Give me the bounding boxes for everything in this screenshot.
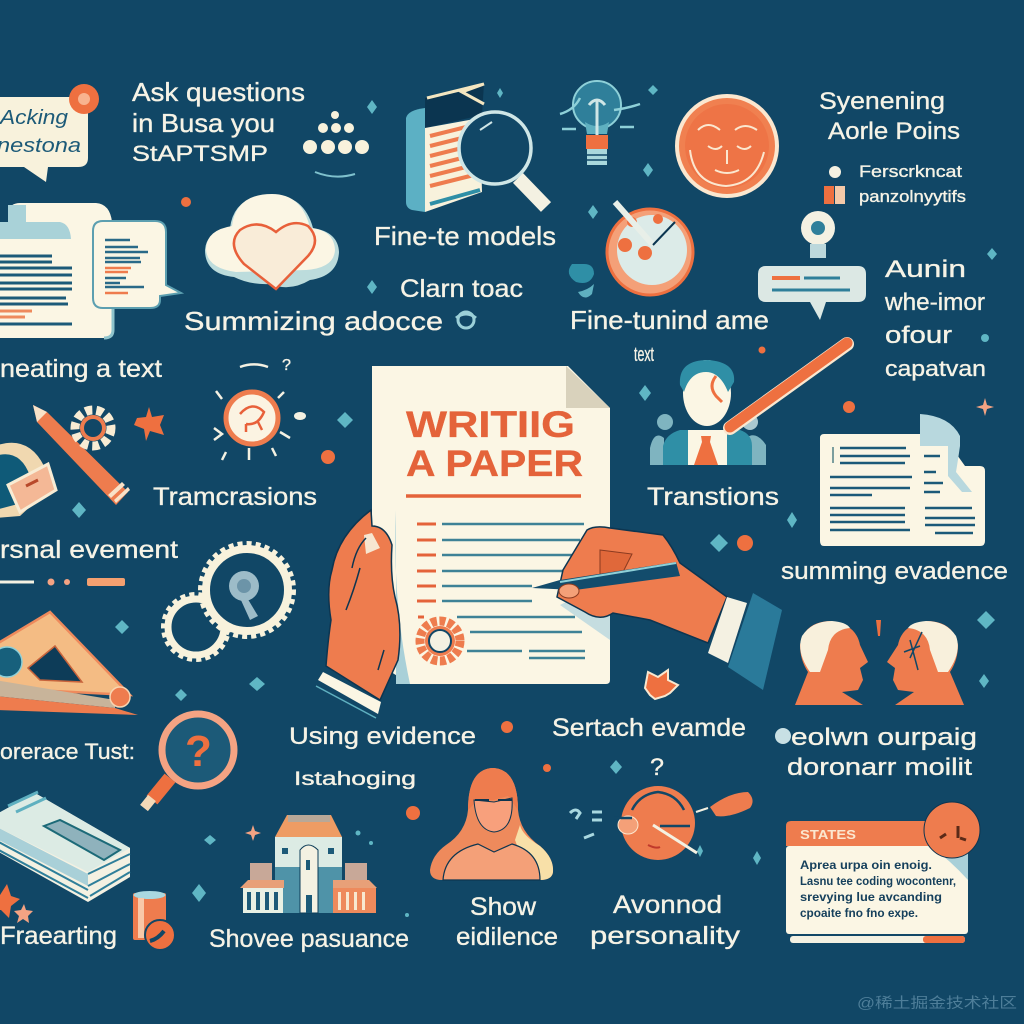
panel: documents with speech (0, 203, 181, 338)
label: fine-tunind ame text: Fine-tunind ame (570, 305, 769, 335)
label: seolwn ourpaig: doronarr moilit (787, 754, 972, 781)
label: personal evement: rsnal evement (0, 536, 178, 564)
icon: right hand with pen (532, 527, 782, 690)
icon: sun-like focus badge: ? (282, 357, 291, 374)
heading: aunin: whe-imor (884, 289, 985, 316)
icon: head with glasses: ? (650, 754, 664, 781)
label: seolwn ourpaig: eolwn ourpaig (791, 724, 977, 751)
icon: pencil and gear (33, 405, 164, 505)
heading: ask questions: in Busa you (132, 108, 275, 138)
panel: asking questions speech bubble: Acking (0, 107, 68, 129)
icon: gears (164, 544, 293, 659)
text block with icon: fersrcinoat: panzolnyytifs (859, 187, 966, 206)
heading: synening: Aorle Poins (828, 118, 960, 145)
icon: cylinder with circle (133, 891, 175, 950)
icon: light bulb (560, 81, 640, 165)
icon: left hand holding paper (316, 510, 400, 718)
lines of text (442, 524, 585, 658)
heading: ask questions (132, 77, 305, 166)
heading: aunin: capatvan (885, 356, 986, 381)
label: clarn toac: Clarn toac (400, 275, 523, 303)
icon: broken clock (569, 202, 693, 298)
label: avonnod personality (590, 891, 741, 950)
icon: magnifier with question mark: ? (185, 727, 212, 776)
text block with icon: fersrcinoat (824, 162, 966, 206)
panel: states card: cpoaite fno fno expe. (800, 908, 918, 920)
label: preface test: orerace Tust: (0, 739, 135, 764)
decorative sparkles (72, 85, 997, 917)
icon: sun-like focus badge (214, 357, 306, 460)
label: heating a text: neating a text (0, 355, 162, 383)
icon: wad of notes (0, 443, 56, 518)
panel: asking questions speech bubble (0, 84, 99, 182)
icon: stars (0, 884, 33, 923)
label: sertach evamde: Sertach evamde (552, 714, 746, 742)
icon: orange gear on paper (420, 621, 460, 661)
heading: ask questions: StAPTSMP (132, 141, 268, 166)
label: seolwn ourpaig (787, 724, 977, 781)
label: shovee pasuance: Shovee pasuance (209, 925, 409, 953)
label: avonnod personality: personality (590, 922, 741, 950)
label: show eidilence: eidilence (456, 923, 558, 951)
label: show eidilence: Show (470, 893, 537, 921)
title: writing a paper: A PAPER (406, 443, 583, 484)
panel: states card: srevying lue avcanding (800, 892, 942, 904)
label: fraerting: Fraearting (0, 922, 117, 950)
heading: aunin (884, 256, 986, 381)
heading: ask questions: Ask questions (132, 77, 305, 107)
panel: states card (786, 802, 980, 943)
label: fine-tunind ame text (570, 305, 769, 366)
label: fine-te models: Fine-te models (374, 221, 556, 251)
icon: star burst (645, 670, 678, 699)
icon: woman bust (430, 768, 553, 880)
panel: states card: Lasnu tee coding wocontenr, (800, 876, 956, 888)
label: fine-tunind ame text: text (634, 344, 654, 366)
heading: aunin: ofour (885, 322, 952, 349)
label: summizing adocce: Summizing adocce (184, 306, 443, 336)
label: tramcrasions: Tramcrasions (153, 483, 317, 511)
icon: person with tie and pencil (650, 343, 847, 465)
heading: synening (819, 88, 960, 145)
title: writing a paper (406, 404, 583, 484)
icon: dot pyramid (303, 111, 369, 177)
label: avonnod personality: Avonnod (613, 891, 722, 919)
panel: states card: Aprea urpa oin enoig. (800, 860, 932, 872)
heading: aunin: Aunin (885, 256, 966, 283)
panel: central paper (372, 366, 610, 684)
icon: document with magnifier (406, 83, 546, 212)
watermark: @稀土掘金技术社区 (857, 995, 1017, 1012)
red rule and dashes (406, 496, 581, 617)
label: transtions: Transtions (647, 483, 779, 511)
dashes under label (0, 578, 125, 586)
icon: head with glasses (570, 754, 753, 860)
icon: set square and ruler (0, 612, 138, 715)
icon: cloud with heart (205, 194, 339, 289)
label: summing evadence: summing evadence (781, 558, 1008, 585)
title: writing a paper: WRITIIG (406, 404, 575, 445)
heading: synening: Syenening (819, 88, 945, 115)
icon: magnifier with question mark (144, 714, 234, 808)
panel: documents right (820, 414, 985, 546)
panel: states card: STATES (800, 827, 856, 842)
text block with icon: fersrcinoat: Ferscrkncat (859, 162, 962, 181)
label: istahoging: Istahoging (294, 769, 416, 790)
icon: swirl (456, 312, 476, 328)
icon: two heads (795, 620, 964, 705)
icon: orange face circle (677, 96, 777, 196)
label: using evidence: Using evidence (289, 723, 476, 750)
icon: building (240, 815, 377, 913)
label: show eidilence (456, 893, 558, 951)
icon: webcam and speech card (758, 211, 866, 320)
icon: stack of papers (0, 792, 130, 902)
